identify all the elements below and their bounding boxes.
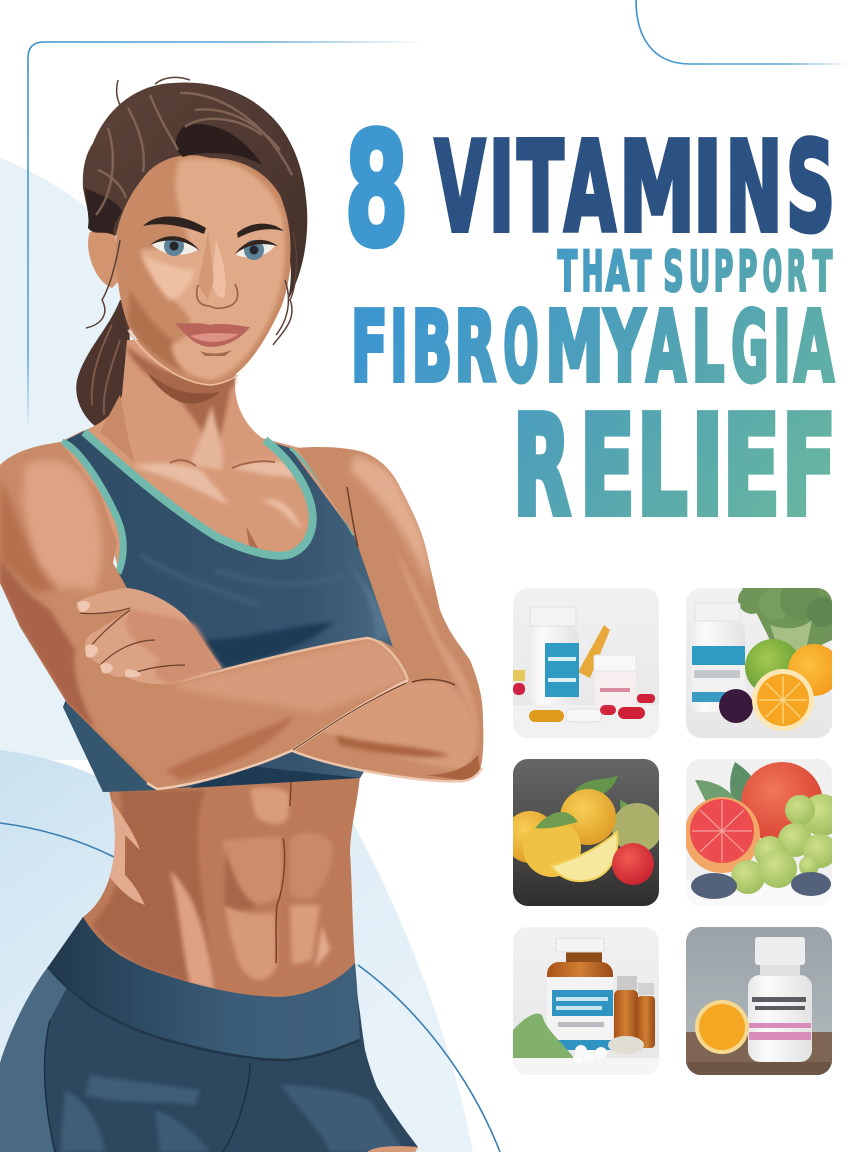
nose highlight bbox=[212, 240, 226, 298]
heading: FIBROMYALGIA: I bbox=[390, 290, 408, 404]
subheading: THAT SUPPORT: R bbox=[787, 240, 806, 304]
frame line: top left horizontal bbox=[44, 41, 425, 43]
sports bra bbox=[62, 431, 410, 792]
bra mint left armhole trim bbox=[62, 442, 123, 573]
title block bbox=[344, 99, 836, 546]
viewer left arm shading bbox=[0, 460, 408, 783]
heading: VITAMINS: T bbox=[518, 116, 563, 260]
subheading: THAT SUPPORT: S bbox=[663, 240, 684, 304]
nose shadow bbox=[198, 230, 214, 300]
heading: VITAMINS: I bbox=[693, 116, 722, 260]
photo grid bbox=[504, 580, 843, 1075]
neck and chest skin bbox=[60, 340, 390, 640]
heading: VITAMINS: N bbox=[726, 116, 782, 260]
face bbox=[116, 150, 292, 385]
subheading: THAT SUPPORT: P bbox=[738, 240, 757, 304]
hair mass bbox=[83, 83, 307, 300]
heading: RELIEF: I bbox=[691, 388, 724, 546]
hand resting on arm bbox=[76, 588, 222, 684]
heading: VITAMINS: I bbox=[489, 116, 514, 260]
heading: RELIEF: E bbox=[580, 388, 635, 546]
heading: VITAMINS: V bbox=[435, 116, 485, 260]
subheading: THAT SUPPORT: H bbox=[582, 240, 603, 304]
subheading: THAT SUPPORT: P bbox=[714, 240, 733, 304]
background shape: upper left blue curve bbox=[0, 158, 140, 760]
subheading: THAT SUPPORT: T bbox=[631, 240, 651, 304]
heading: FIBROMYALGIA: M bbox=[545, 290, 604, 404]
numeral 8: 8 bbox=[344, 99, 408, 281]
frame line: lower left arc bbox=[0, 823, 114, 857]
heading: RELIEF: R bbox=[513, 388, 571, 546]
photo: white bottle with orange half bbox=[686, 927, 832, 1075]
hair dark bun bbox=[85, 188, 122, 236]
ear bbox=[88, 232, 120, 288]
subheading: THAT SUPPORT: O bbox=[763, 240, 782, 304]
illustration: fit woman with crossed arms bbox=[0, 77, 483, 1152]
subheading: THAT SUPPORT: T bbox=[558, 240, 577, 304]
subheading: THAT SUPPORT: A bbox=[606, 240, 630, 304]
hair dark underside bbox=[176, 124, 262, 165]
eyebrows bbox=[143, 216, 284, 238]
heading: FIBROMYALGIA: B bbox=[412, 290, 452, 404]
midriff with abs bbox=[83, 775, 360, 997]
lips bbox=[175, 323, 250, 356]
loose hair wisps bbox=[86, 77, 296, 345]
heading: FIBROMYALGIA: G bbox=[731, 290, 768, 404]
photo: supplement bottle with fruit and broccoli bbox=[686, 580, 840, 738]
bra mint neckline trim bbox=[84, 432, 313, 556]
heading: FIBROMYALGIA: R bbox=[454, 290, 496, 404]
photo: amber jar with herbs and pills bbox=[513, 927, 659, 1075]
heading: VITAMINS: M bbox=[619, 116, 695, 260]
photo: grapefruit apple grapes and berries bbox=[686, 759, 832, 899]
heading: FIBROMYALGIA: F bbox=[351, 290, 388, 404]
subheading: THAT SUPPORT: T bbox=[813, 240, 832, 304]
bra mint right armhole trim bbox=[290, 448, 354, 535]
cheek shadow bbox=[128, 290, 185, 372]
heading: VITAMINS: A bbox=[564, 116, 616, 260]
subheading: THAT SUPPORT: U bbox=[689, 240, 710, 304]
heading: FIBROMYALGIA: O bbox=[503, 290, 539, 404]
heading: RELIEF: E bbox=[722, 388, 780, 546]
frame line: top right arc bbox=[636, 0, 848, 64]
abs shading bbox=[92, 782, 333, 990]
heading: FIBROMYALGIA: I bbox=[773, 290, 791, 404]
photo: supplement bottles and capsules bbox=[513, 588, 659, 738]
nose outline bbox=[197, 284, 238, 308]
head bbox=[83, 77, 307, 385]
cheek highlight bbox=[142, 255, 195, 300]
heading: FIBROMYALGIA: Y bbox=[604, 290, 646, 404]
eyes bbox=[150, 236, 278, 260]
heading: FIBROMYALGIA: A bbox=[646, 290, 686, 404]
frame line: lower right arc bbox=[358, 965, 500, 1152]
background shape: lower blue curve bbox=[0, 750, 473, 1152]
face light zone bbox=[140, 158, 285, 380]
chin rim bbox=[128, 330, 238, 385]
viewer right arm shading bbox=[320, 455, 480, 780]
frame line: top left corner bbox=[28, 42, 44, 425]
arm: viewer left arm and forearm bbox=[0, 442, 408, 789]
heading: RELIEF: L bbox=[637, 388, 688, 546]
hair shine strands bbox=[96, 93, 292, 215]
heading: FIBROMYALGIA: L bbox=[692, 290, 724, 404]
arm: viewer right arm bbox=[287, 447, 483, 781]
shorts bbox=[0, 917, 418, 1152]
photo: citrus fruit on dark background bbox=[504, 759, 662, 906]
ponytail bbox=[76, 300, 130, 428]
